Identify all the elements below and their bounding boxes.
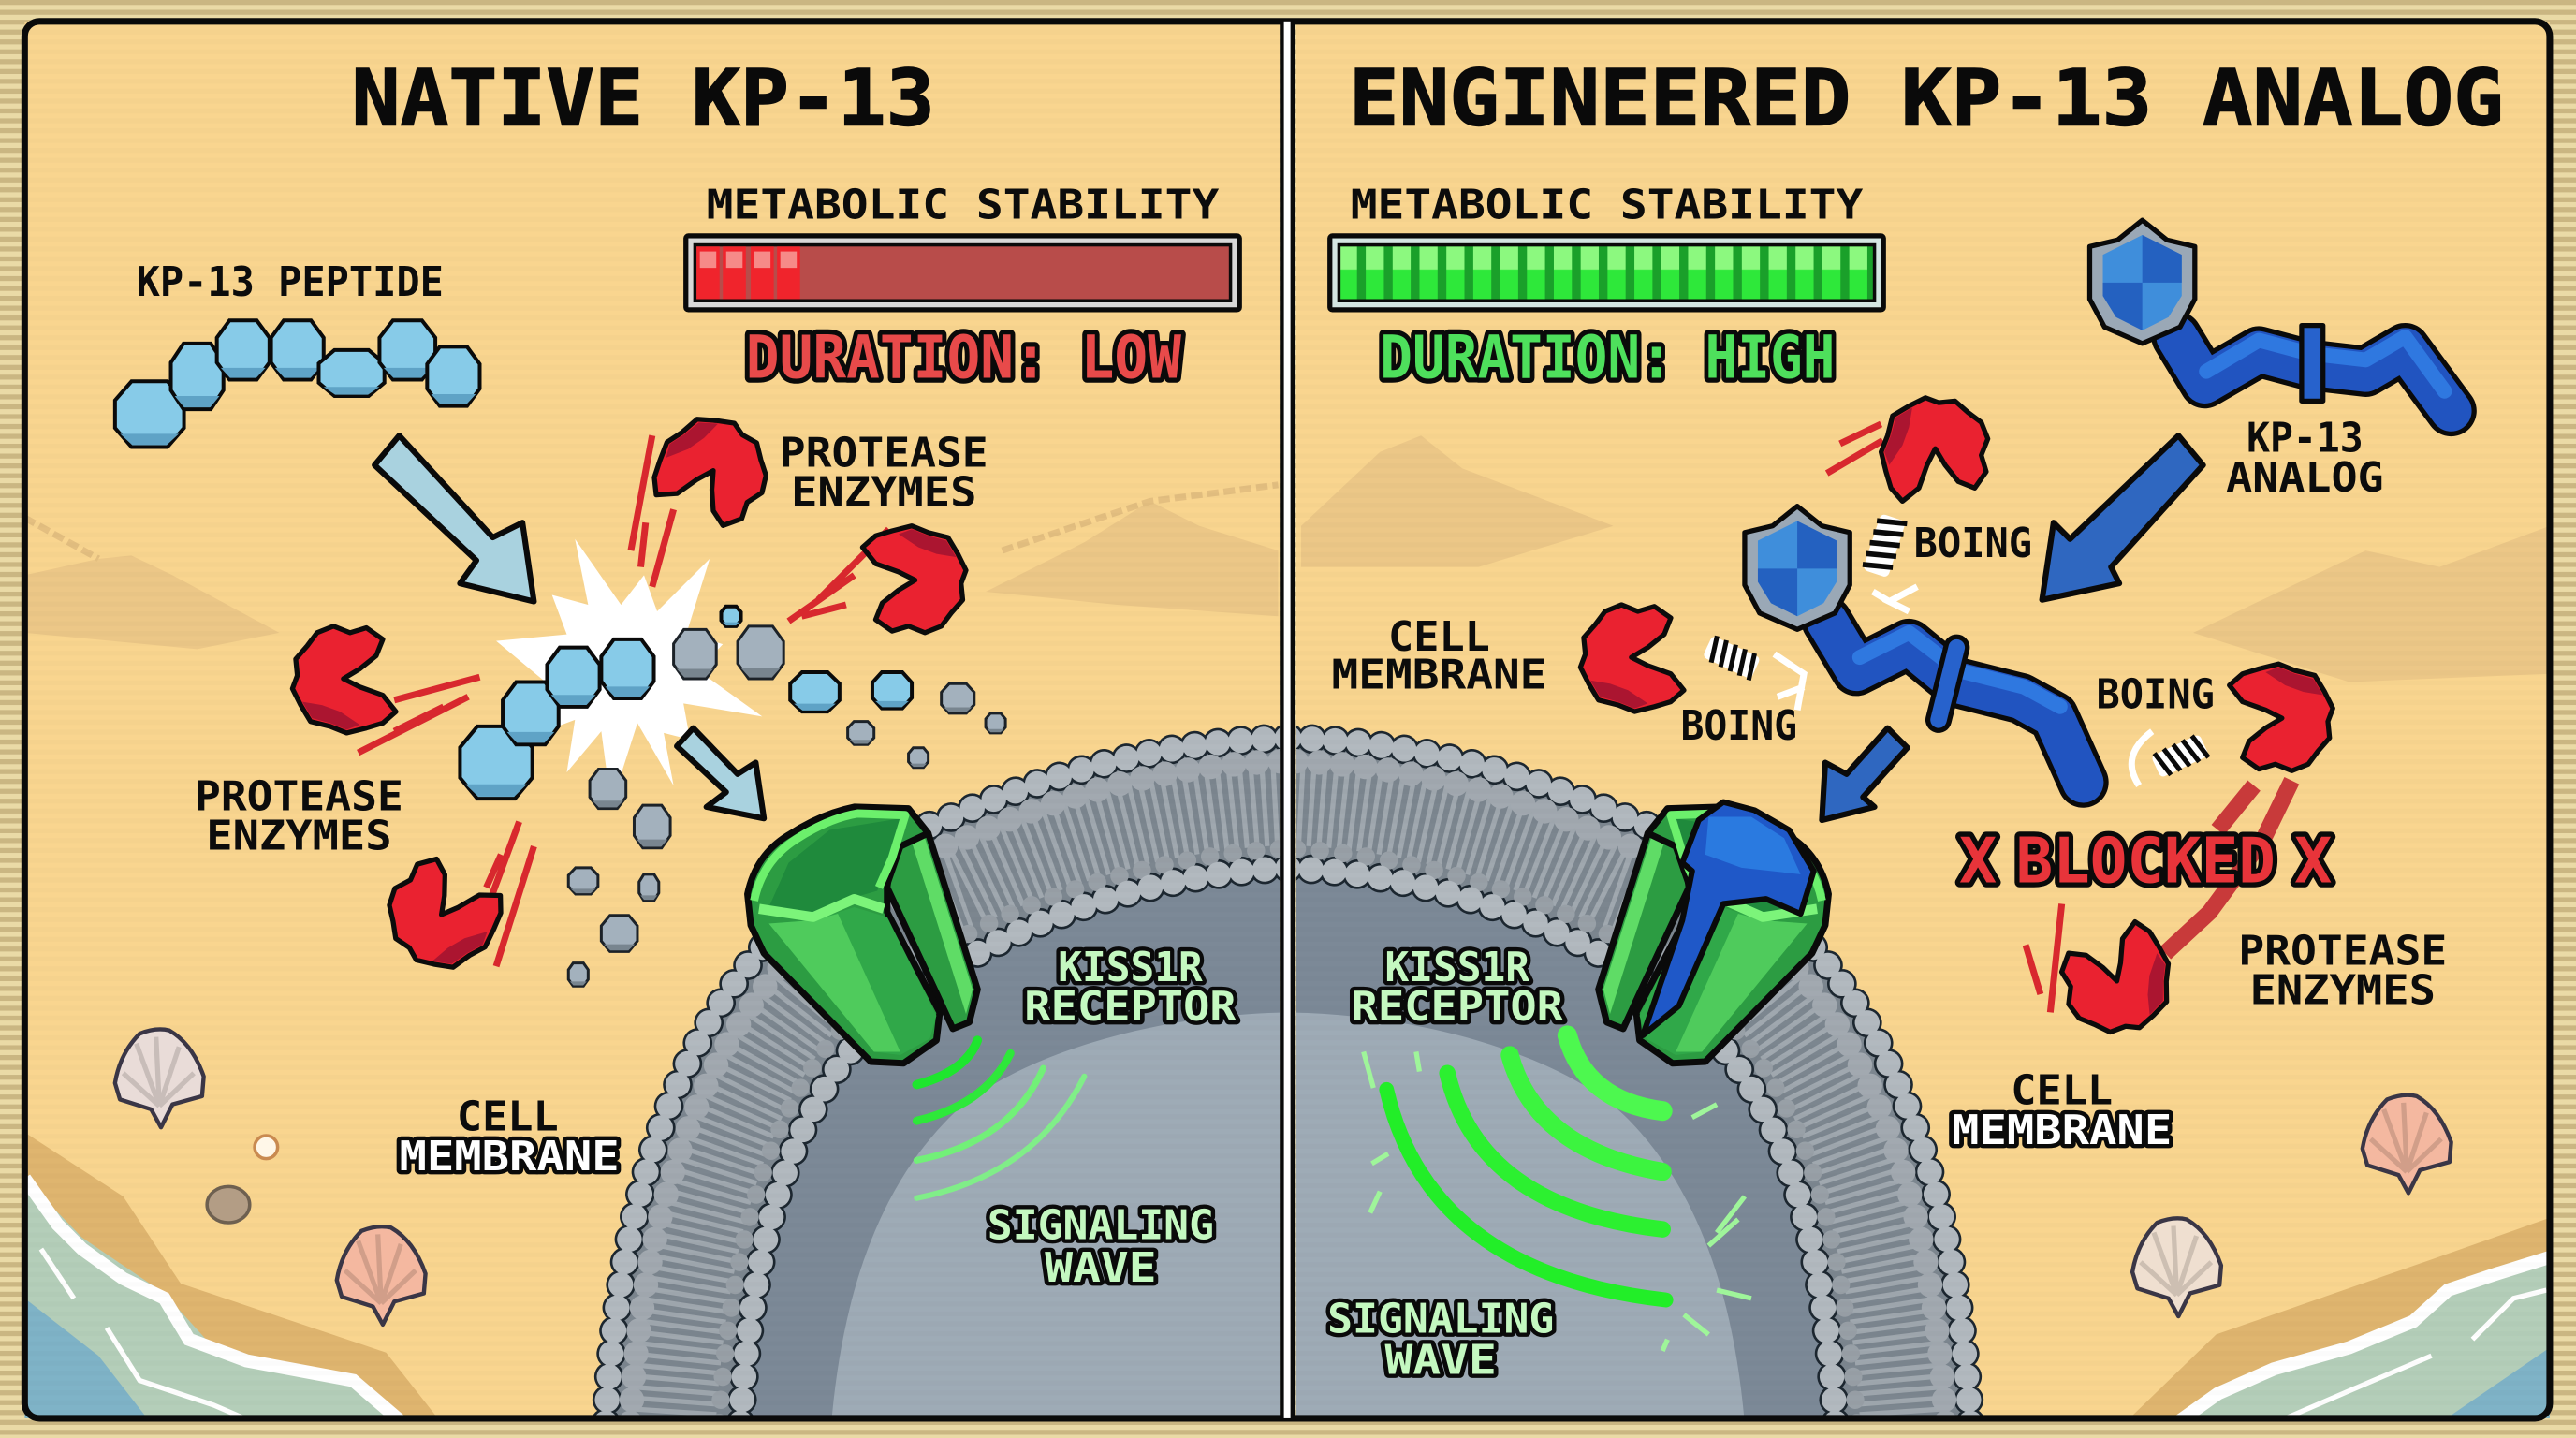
title: engineered: ENGINEERED KP-13 ANALOG	[1349, 53, 2504, 143]
boing label left: BOING	[1680, 702, 1797, 750]
duration low label: DURATION: LOW	[746, 323, 1182, 392]
burst	[496, 539, 762, 805]
impact sparks	[1775, 587, 2152, 785]
KP-13 analog top: chain	[2177, 326, 2452, 411]
signaling wave arcs left	[916, 1040, 1084, 1198]
receptor right with blue plug	[1599, 802, 1828, 1064]
KP-13 peptide chain	[115, 320, 479, 447]
shield bound	[1745, 506, 1850, 629]
title: native: NATIVE KP-13	[352, 53, 935, 143]
metabolic stability gauge: engineered: METABOLIC STABILITY	[1351, 181, 1864, 228]
kiss1r label right: RECEPTOR	[1352, 983, 1564, 1031]
enzyme top left panel	[638, 398, 785, 544]
cell membrane label left	[399, 1093, 620, 1181]
metabolic stability gauge: native	[683, 181, 1242, 313]
blocked label: X	[2294, 825, 2332, 898]
bound analog chain	[1827, 622, 2083, 783]
cell membrane label top right: MEMBRANE	[1332, 652, 1546, 699]
enzyme bottom right panel	[2053, 917, 2183, 1044]
arrow: into receptor	[1822, 728, 1908, 820]
enzyme bottom left panel	[369, 841, 517, 989]
protease enzymes label left: PROTEASE	[195, 772, 403, 820]
metabolic stability gauge: engineered	[1327, 181, 1886, 313]
motion streaks	[359, 424, 2062, 1012]
receptor left	[748, 807, 977, 1064]
pebbles left	[207, 1136, 278, 1223]
signaling wave label left	[988, 1202, 1214, 1292]
blocked label: X	[1959, 825, 1997, 898]
signaling wave label left: WAVE	[1045, 1244, 1157, 1292]
signal sparks right	[1364, 1051, 1751, 1351]
shell pink left	[337, 1226, 426, 1325]
signaling wave label right: SIGNALING	[1327, 1296, 1554, 1343]
arrow: peptide to burst	[374, 435, 534, 601]
boing label right: BOING	[2097, 671, 2215, 719]
metabolic stability gauge: native: METABOLIC STABILITY	[707, 181, 1220, 228]
signaling wave arcs right	[1386, 1035, 1666, 1300]
duration high label: DURATION: HIGH	[1380, 323, 1835, 392]
center divider	[1280, 22, 1295, 1418]
sand dunes left	[24, 485, 1278, 649]
protease enzymes label top	[780, 430, 988, 517]
KP-13 peptide label: KP-13 PEPTIDE	[137, 258, 444, 306]
enzyme left left panel	[292, 626, 396, 733]
shell cream left	[115, 1029, 204, 1127]
protease enzymes label left: ENZYMES	[206, 813, 392, 860]
cell membrane label right	[1952, 1067, 2172, 1154]
arrow: burst to receptor	[677, 728, 764, 818]
blocked streak	[2165, 781, 2291, 953]
cell membrane label right: CELL	[2011, 1067, 2113, 1115]
kiss1r label left: RECEPTOR	[1024, 983, 1237, 1031]
cell membrane label top right	[1332, 613, 1546, 699]
beach water right	[2117, 1218, 2550, 1430]
blocked label: BLOCKED	[2016, 825, 2276, 898]
protease enzymes label right: ENZYMES	[2250, 967, 2436, 1015]
kiss1r label left	[1024, 944, 1237, 1031]
beach water left	[24, 1132, 446, 1430]
cell membrane label left: CELL	[457, 1093, 559, 1141]
spring right	[2150, 733, 2210, 779]
spring left	[1702, 634, 1762, 681]
spring top	[1861, 513, 1908, 579]
KP-13 analog label	[2226, 415, 2384, 502]
enzyme left right panel	[1580, 605, 1684, 712]
arrow: analog to receptor	[2042, 435, 2203, 600]
cell membrane label left: MEMBRANE	[399, 1133, 620, 1181]
sand dunes right	[1301, 435, 2550, 682]
panel: engineered KP-13 analog	[1278, 22, 2550, 1438]
signaling wave label right: WAVE	[1385, 1337, 1497, 1385]
shell cream right	[2132, 1218, 2221, 1316]
cell membrane label top right: CELL	[1388, 613, 1490, 661]
protease enzymes label left	[195, 772, 403, 860]
KP-13 analog label: ANALOG	[2226, 454, 2384, 502]
enzyme top right panel	[1881, 398, 1988, 501]
cell membrane left	[605, 738, 1298, 1438]
signaling wave label left: SIGNALING	[988, 1202, 1214, 1250]
KP-13 analog label: KP-13	[2247, 415, 2364, 462]
protease enzymes label top: ENZYMES	[791, 469, 976, 517]
signaling wave label right	[1327, 1296, 1554, 1385]
panel: native KP-13	[24, 22, 1298, 1438]
kiss1r label right: KISS1R	[1385, 944, 1530, 991]
protease enzymes label top: PROTEASE	[780, 430, 988, 477]
boing label top: BOING	[1914, 520, 2032, 567]
enzyme right left panel	[862, 526, 966, 633]
shell pink right	[2363, 1095, 2452, 1193]
broken peptide	[460, 639, 654, 799]
cell membrane label right: MEMBRANE	[1952, 1107, 2172, 1154]
peptide fragments	[568, 607, 1005, 986]
protease enzymes label right	[2238, 927, 2447, 1015]
kiss1r label left: KISS1R	[1058, 944, 1203, 991]
enzyme right right panel	[2230, 664, 2333, 770]
protease enzymes label right: PROTEASE	[2238, 927, 2447, 975]
kiss1r label right	[1352, 944, 1564, 1031]
cell membrane right	[1278, 738, 1971, 1438]
shield top	[2089, 220, 2195, 344]
